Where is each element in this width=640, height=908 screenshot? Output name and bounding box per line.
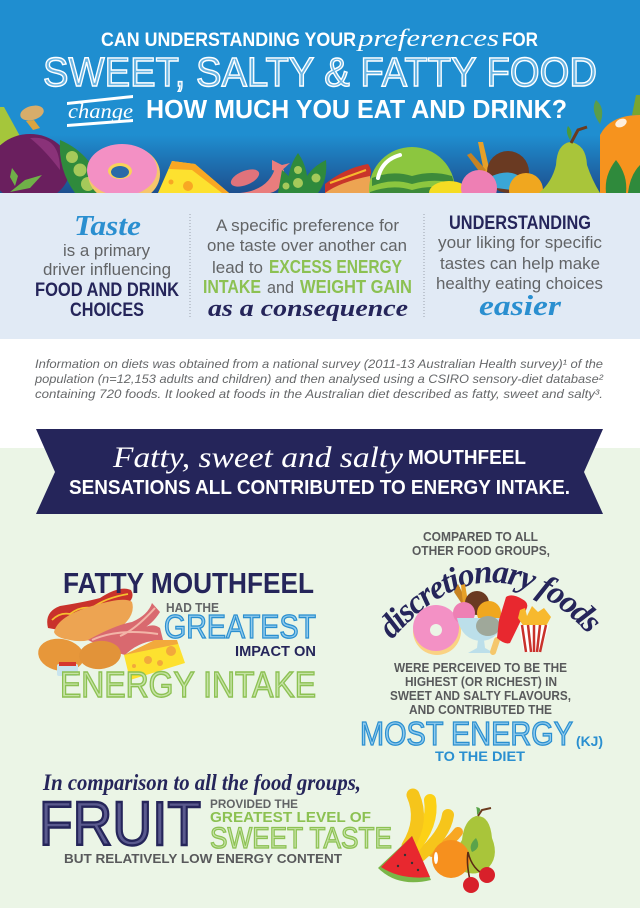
icon: pea pod details — [282, 166, 320, 190]
panel: header background — [0, 0, 640, 193]
text block: specific preference: lead to — [212, 258, 263, 277]
text block: compared to all — [412, 530, 550, 558]
icon: orange — [432, 840, 470, 878]
text block: understanding: UNDERSTANDING — [449, 213, 591, 234]
icon: pea pods right — [606, 160, 640, 193]
icon: pear — [539, 126, 600, 193]
icon: ice cream scoops — [461, 142, 543, 193]
dividers — [190, 214, 424, 317]
text block: understanding: tastes can help make — [440, 254, 600, 273]
title — [43, 26, 597, 127]
text block: fatty mouthfeel: GREATEST — [164, 608, 316, 645]
banner: MOUTHFEEL — [408, 447, 526, 469]
banner: Fatty, sweet and salty — [112, 441, 404, 474]
banner — [36, 429, 603, 514]
text block: specific preference: and — [267, 278, 294, 297]
icon: hot dog — [325, 164, 372, 193]
text block: fruit: FRUIT — [39, 790, 201, 859]
illustration: fruit — [378, 795, 495, 893]
text block: fruit: SWEET TASTE — [210, 822, 392, 855]
text block: understanding: your liking for specific — [438, 233, 602, 252]
text block: survey method: population (n=12,153 adults and children) and then analysed using a CSIRO sensory-diet database² — [34, 372, 604, 386]
icon: peas — [278, 153, 326, 193]
text block: specific preference: INTAKE — [203, 276, 261, 297]
text block: specific preference: EXCESS ENERGY — [269, 256, 403, 277]
icon: floating leaf — [594, 100, 602, 124]
icon: donut — [413, 605, 461, 655]
text block: fruit — [39, 770, 392, 866]
text block: perceived highest: SWEET AND SALTY FLAVOURS, — [390, 689, 571, 703]
text block: fatty mouthfeel: ENERGY INTAKE — [60, 664, 316, 705]
text block: understanding: easier — [479, 291, 562, 322]
text block: specific preference: WEIGHT GAIN — [300, 276, 412, 297]
icon: mushroom — [20, 106, 44, 130]
text block: taste: is a primary — [63, 242, 151, 260]
text block: survey method: containing 720 foods. It looked at foods in the Australian diet described as fatty, sweet and salty³. — [35, 387, 603, 401]
text block: understanding: healthy eating choices — [436, 274, 603, 293]
icon: popsicle — [493, 595, 527, 652]
icon: sundae — [453, 584, 504, 653]
banner: SENSATIONS ALL CONTRIBUTED TO ENERGY INTAKE. — [69, 477, 570, 499]
text block: most energy: (KJ) — [576, 733, 603, 749]
text block: survey method: Information on diets was obtained from a national survey (2011-13 Australian Health survey)¹ of the — [35, 357, 603, 371]
text block: most energy: MOST ENERGY — [360, 715, 573, 752]
title: CAN UNDERSTANDING YOUR — [101, 29, 356, 51]
icon: donut — [87, 144, 160, 193]
icon: leek — [0, 107, 20, 146]
text block: fatty mouthfeel: FATTY MOUTHFEEL — [63, 568, 314, 600]
text block: fruit: GREATEST LEVEL OF — [210, 810, 371, 826]
text block: perceived highest: AND CONTRIBUTED THE — [409, 703, 552, 717]
curved heading: discretionary foods: discretionary foods — [382, 567, 599, 638]
text block: specific preference: A specific preference for — [216, 216, 399, 235]
icon: chicken nuggets — [36, 635, 122, 676]
text block: fruit: In comparison to all the food groups, — [42, 770, 361, 795]
icon: orange pepper — [600, 95, 640, 193]
title: FOR — [502, 29, 538, 51]
text block: fruit: PROVIDED THE — [210, 797, 298, 811]
text block: perceived highest: HIGHEST (OR RICHEST) IN — [405, 675, 557, 689]
text block: fatty mouthfeel — [60, 568, 316, 705]
icon: hot dog — [47, 589, 133, 641]
illustration: discretionary foods — [413, 584, 551, 655]
text block: fatty mouthfeel: IMPACT ON — [235, 643, 316, 660]
icon: watermelon slice — [378, 836, 431, 882]
text block: fruit: BUT RELATIVELY LOW ENERGY CONTENT — [64, 851, 342, 866]
icon: watermelon — [369, 147, 454, 193]
text block: taste: FOOD AND DRINK — [35, 280, 179, 301]
icon: salami — [228, 160, 290, 193]
text block: taste — [35, 211, 179, 321]
icon: cheese — [158, 161, 229, 193]
icon: cherries — [463, 838, 495, 893]
panel: key messages — [0, 193, 640, 339]
illustration: food band — [0, 95, 640, 193]
title: SWEET, SALTY & FATTY FOOD — [43, 49, 597, 95]
panel: findings background — [0, 448, 640, 908]
icon: cheese — [124, 640, 185, 680]
text block: perceived highest — [390, 661, 571, 717]
text block: perceived highest: WERE PERCEIVED TO BE THE — [394, 661, 567, 675]
icon: lemon — [429, 181, 462, 193]
text block: taste: Taste — [74, 211, 141, 242]
illustration: fatty foods — [36, 589, 185, 680]
text block: specific preference: one taste over another can — [207, 236, 407, 255]
text block: specific preference: as a consequence — [208, 296, 408, 322]
icon: fries — [518, 606, 551, 652]
title: preferences — [355, 26, 499, 52]
title: HOW MUCH YOU EAT AND DRINK? — [146, 94, 567, 124]
title: change — [68, 99, 133, 123]
text block: compared to all: COMPARED TO ALL — [423, 530, 538, 544]
icon: bacon — [88, 603, 163, 655]
text block: specific preference — [203, 216, 412, 322]
text block: compared to all: OTHER FOOD GROUPS, — [412, 544, 550, 558]
icon: cabbage — [0, 134, 68, 193]
panel: survey method background — [0, 339, 640, 448]
icon: pear — [456, 807, 495, 874]
icon: pea pod — [60, 140, 97, 193]
text block: most energy: TO THE DIET — [435, 749, 526, 764]
text block: fatty mouthfeel: HAD THE — [166, 600, 219, 615]
text block: taste: driver influencing — [43, 261, 171, 279]
icon: bananas — [408, 795, 458, 856]
text block: survey method — [34, 357, 604, 401]
text block: understanding — [436, 213, 603, 322]
text block: taste: CHOICES — [70, 300, 144, 321]
